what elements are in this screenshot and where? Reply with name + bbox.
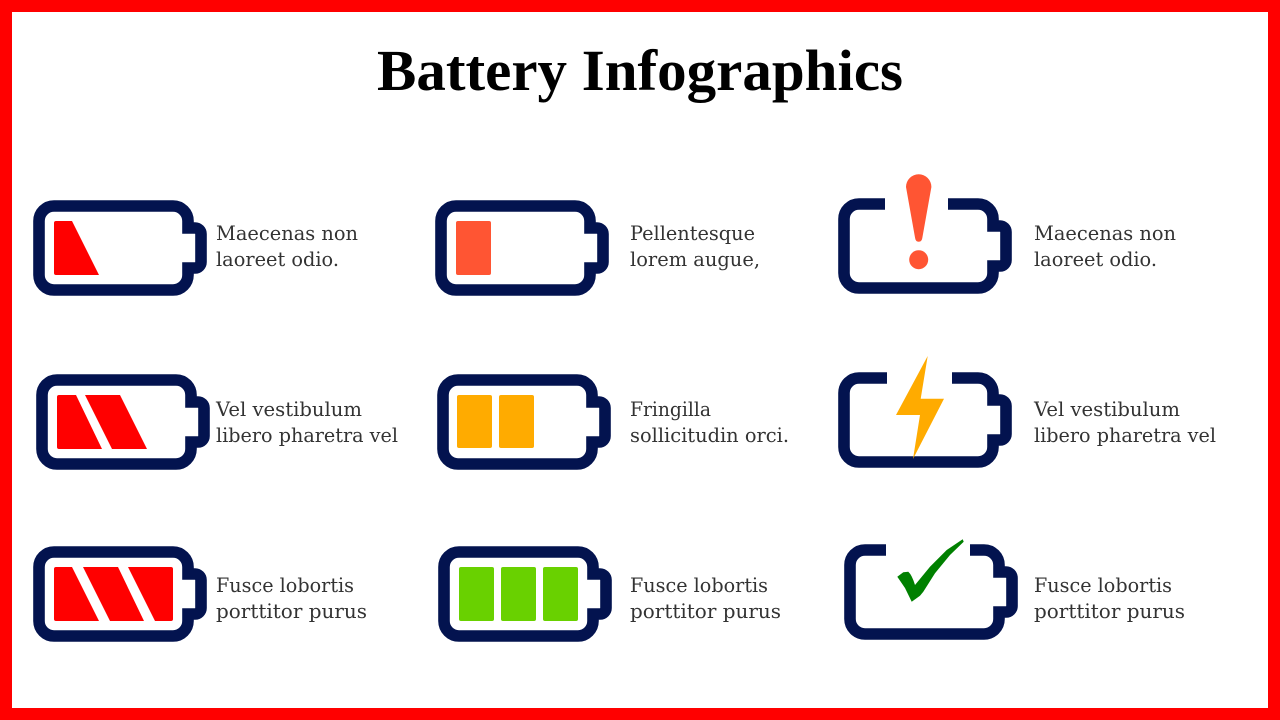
title: Battery Infographics [377,38,903,103]
text: Fusce lobortis porttitor purus: Fusce lobortis [630,574,768,597]
text: Fringilla sollicitudin orci [630,398,789,447]
text: Maecenas non laoreet odio: Maecenas non [216,222,358,245]
text: Maecenas non laoreet odio: laoreet odio. [1034,248,1157,271]
text: Fringilla sollicitudin orci: Fringilla [630,398,711,421]
text: Fusce lobortis porttitor purus [630,574,781,623]
panel: medium battery amber [443,380,789,464]
icon: battery with check mark [850,539,1012,634]
panel: full battery green [444,552,781,636]
text: Maecenas non laoreet odio [216,222,358,271]
text: Vel vestibulum libero pharetra vel: Vel vestibulum [1033,398,1180,421]
panel: full battery red [39,552,367,636]
text: Maecenas non laoreet odio: Maecenas non [1034,222,1176,245]
panel: medium battery red [42,380,398,464]
text: Pellentesque lorem augue: lorem augue, [630,248,760,271]
text: Vel vestibulum libero pharetra vel: libero pharetra vel [216,424,398,447]
text: Fusce lobortis porttitor purus: porttitor purus [630,600,781,623]
text: Fusce lobortis porttitor purus [216,574,367,623]
text: Fusce lobortis porttitor purus: Fusce lobortis [1034,574,1172,597]
icon: battery two amber bars [443,380,605,464]
panel: low battery red [39,206,358,290]
icon: battery with lightning bolt [844,356,1006,462]
text: Pellentesque lorem augue [630,222,760,271]
text: Fusce lobortis porttitor purus [1034,574,1185,623]
icon: battery one orange bar [441,206,603,290]
text: Vel vestibulum libero pharetra vel [215,398,398,447]
text: Pellentesque lorem augue: Pellentesque [630,222,755,245]
icon: battery two red bars [42,380,204,464]
icon: battery three red bars [39,552,201,636]
text: Fringilla sollicitudin orci: sollicitudin orci. [630,424,789,447]
panel: low battery orange [441,206,760,290]
panel: battery charging [844,356,1216,462]
text: Fusce lobortis porttitor purus: Fusce lobortis [216,574,354,597]
text: Vel vestibulum libero pharetra vel: Vel vestibulum [215,398,362,421]
text: Fusce lobortis porttitor purus: porttitor purus [1034,600,1185,623]
icon: battery one red bar [39,206,201,290]
icon: battery with exclamation mark [844,174,1006,288]
text: Maecenas non laoreet odio: laoreet odio. [216,248,339,271]
panel: battery warning [844,174,1176,288]
text: Fusce lobortis porttitor purus: porttitor purus [216,600,367,623]
icon: battery three green bars [444,552,606,636]
panel: battery ok [850,539,1185,634]
text: Vel vestibulum libero pharetra vel: libero pharetra vel [1034,424,1216,447]
text: Maecenas non laoreet odio [1034,222,1176,271]
text: Vel vestibulum libero pharetra vel [1033,398,1216,447]
